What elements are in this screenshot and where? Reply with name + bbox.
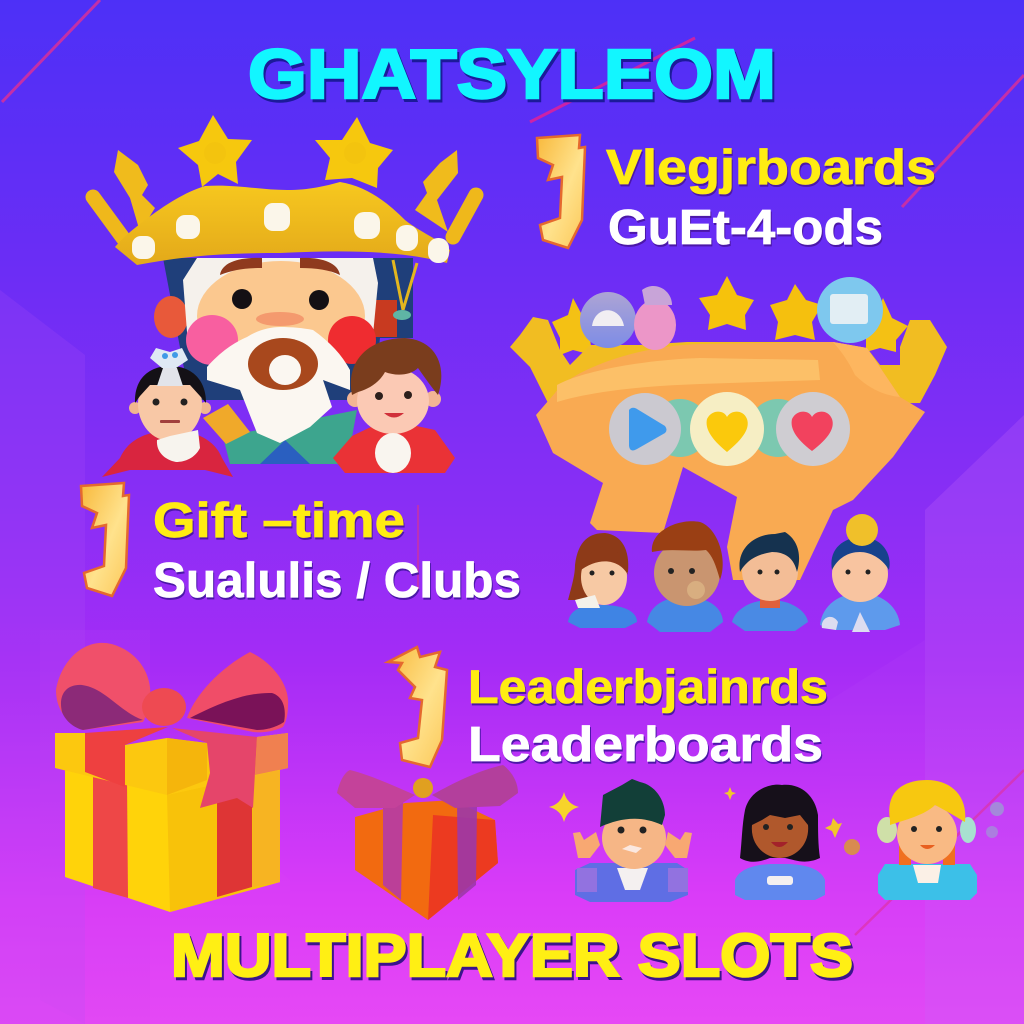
icon: large red and yellow gift box [55, 643, 288, 912]
avatar 4 [820, 514, 900, 632]
crown [93, 115, 476, 265]
text line: Vlegjrboards [606, 141, 936, 195]
illustration: orange crown podium with buttons and avatars [510, 276, 947, 632]
round buttons [609, 392, 850, 466]
avatar: blonde girl [877, 780, 977, 900]
icon: small sparkles [724, 787, 1004, 855]
text line: Gift –time [153, 494, 405, 548]
king face [154, 258, 417, 464]
text line: Sualulis / Clubs [153, 554, 521, 608]
left avatar [102, 348, 233, 477]
avatar: girl with curly hair [735, 785, 825, 900]
avatar: boy with cap [573, 779, 692, 902]
text line: GuEt-4-ods [608, 201, 883, 255]
icon: sparkle [549, 792, 579, 822]
text line: Leaderbjainrds [468, 660, 828, 713]
text block: leaderboards and guilds [537, 135, 936, 255]
title: GHATSYLEOM [248, 35, 776, 113]
crown podium [510, 276, 947, 580]
right avatar [333, 338, 455, 473]
bubble icons [580, 277, 883, 350]
numeral icon [537, 135, 585, 248]
numeral icon [388, 647, 447, 767]
text line: Leaderboards [468, 718, 823, 772]
icon: small orange gift box [337, 765, 518, 920]
text block: gift-time and socials / clubs [81, 483, 521, 608]
avatar 1 [568, 533, 637, 628]
avatar 2 [647, 521, 723, 632]
footer title: MULTIPLAYER SLOTS [171, 922, 853, 989]
illustration: king with crown and two avatars [93, 115, 476, 477]
text block: leaderboards [388, 647, 828, 772]
avatar 3 [732, 532, 808, 631]
numeral icon [81, 483, 129, 596]
